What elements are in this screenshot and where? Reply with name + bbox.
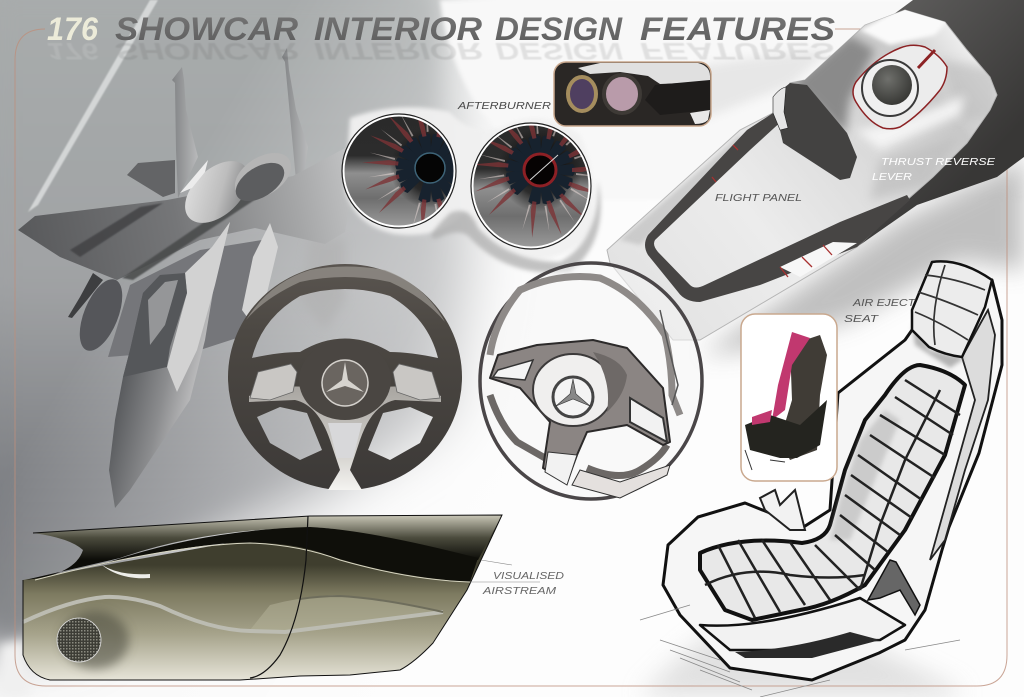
- label: air eject: AIR EJECT: [852, 298, 916, 309]
- right button pad: [393, 364, 440, 400]
- title: INTERIOR: [314, 11, 482, 47]
- title: DESIGN: [495, 11, 623, 47]
- photo: ejection seat inset: [741, 314, 837, 481]
- lower front bolster: [700, 598, 905, 650]
- jet shadow behind fuselage: [300, 235, 345, 330]
- engine right: [227, 143, 299, 209]
- cockpit canopy: [123, 273, 187, 377]
- label: lever: LEVER: [872, 171, 912, 183]
- console shading: [620, 5, 1000, 245]
- ejection seat legs: [745, 450, 785, 470]
- right tail fin: [282, 48, 308, 182]
- left tailplane: [127, 160, 175, 197]
- label: thrust reverse: THRUST REVERSE: [881, 156, 996, 168]
- title reflection: [47, 38, 835, 65]
- left gauge blades: [364, 116, 454, 224]
- nozzle right: [604, 75, 640, 113]
- upper spur: [25, 515, 502, 580]
- title reflection: FEATURES: [640, 38, 835, 65]
- right gauge blades: [476, 126, 588, 238]
- ejection seat harness: [772, 332, 810, 420]
- label: airstream: AIRSTREAM: [482, 586, 557, 597]
- seat shell fill: [663, 280, 1002, 680]
- wing: [18, 147, 352, 280]
- door body: [23, 515, 502, 680]
- cushion panel: [700, 365, 965, 620]
- panel: afterburner gauges: [342, 100, 608, 273]
- backrest side shading: [930, 310, 995, 560]
- sketch bottom segment: [572, 465, 670, 498]
- wing trailing stripe: [122, 193, 262, 280]
- panel: door with airstream: [23, 515, 540, 680]
- panel: flight console: [607, 0, 1024, 340]
- chrome airstream line: [23, 597, 443, 632]
- left button pad: [250, 364, 297, 400]
- title reflection: INTERIOR: [314, 38, 483, 65]
- panel: seat sketch: [640, 261, 1002, 697]
- right gauge: [470, 122, 592, 250]
- cushion shading: [830, 410, 900, 540]
- chrome upper line: [300, 596, 443, 612]
- steering wheel render: [228, 264, 462, 490]
- floor hatching: [640, 605, 960, 697]
- sketch dark hub side: [593, 352, 627, 412]
- title: 176: [47, 11, 98, 47]
- ejection seat pink strap: [752, 410, 772, 425]
- inset lower highlight: [690, 110, 710, 124]
- backrest quilting: [815, 380, 960, 590]
- ejection seat pan: [745, 400, 827, 458]
- speaker: [57, 611, 129, 669]
- rail chrome: [780, 242, 857, 277]
- console body: [607, 10, 997, 340]
- sketch right pad: [630, 398, 667, 442]
- label: flight panel: FLIGHT PANEL: [715, 193, 802, 204]
- jet fighter: [18, 48, 352, 508]
- title: SHOWCAR: [115, 11, 298, 47]
- light crease: [35, 543, 470, 582]
- engine left: [174, 149, 260, 235]
- missile: [68, 273, 103, 318]
- rotary knob: [862, 60, 918, 116]
- silver spokes: [249, 386, 441, 490]
- recess frame: [645, 113, 910, 302]
- sketch left pad: [493, 360, 533, 380]
- headrest: [912, 261, 992, 357]
- dark band: [100, 527, 478, 582]
- red accents: [712, 145, 832, 277]
- sketch spokes: [490, 340, 670, 482]
- label: seat: SEAT: [844, 314, 879, 325]
- chrome lens fill: [250, 595, 443, 632]
- left gauge: [341, 113, 457, 229]
- airbag hub: [299, 340, 391, 420]
- fuselage silver: [167, 222, 230, 392]
- title reflection: 176: [47, 38, 98, 65]
- gauge housing: [345, 107, 594, 260]
- steering wheel sketch: [480, 263, 702, 499]
- seat belt buckle: [760, 490, 805, 530]
- door shut line: [250, 516, 308, 678]
- lower centre opening: [328, 423, 362, 458]
- door outline: [23, 515, 502, 680]
- underbody panel: [108, 240, 265, 357]
- right intake: [242, 223, 278, 317]
- knob surround: [853, 45, 947, 129]
- sketch hub: [533, 354, 613, 426]
- right gauge dial: [524, 154, 556, 186]
- wheel rim and spokes: [228, 264, 462, 490]
- bolster dark shadow: [735, 632, 880, 658]
- red slider: [918, 50, 935, 68]
- headrest lines: [915, 265, 985, 345]
- ejection seat back: [780, 335, 827, 460]
- title: [47, 11, 836, 47]
- inset dark wing: [645, 80, 710, 115]
- sketch badge: [553, 377, 593, 417]
- rear fuselage dark tank: [71, 273, 131, 357]
- console dark surround: [805, 0, 1024, 247]
- left tail fin: [172, 67, 198, 198]
- housing shadow: [431, 180, 601, 273]
- sketch inner band: [490, 276, 680, 415]
- engine highlight: [180, 160, 208, 193]
- headrest shadow: [912, 325, 965, 368]
- left gauge dial: [415, 153, 445, 183]
- badge: [322, 360, 368, 406]
- photo: afterburner exhaust inset: [554, 62, 711, 126]
- label: visualised: VISUALISED: [493, 571, 564, 582]
- handle accent: [102, 565, 150, 578]
- sketch lower band: [490, 395, 667, 476]
- airstream pointer lines: [470, 560, 540, 582]
- seat side bracket: [868, 560, 920, 615]
- title reflection: DESIGN: [495, 38, 623, 65]
- seat cushion quilting: [705, 540, 865, 618]
- nozzle left: [568, 77, 596, 111]
- engine right dark core: [229, 155, 291, 209]
- rim top highlight: [246, 266, 445, 322]
- fuselage nose: [109, 222, 230, 508]
- sketch white spoke base: [545, 452, 577, 485]
- lever stem: [773, 87, 788, 130]
- title: FEATURES: [640, 11, 836, 47]
- title reflection: SHOWCAR: [115, 38, 299, 65]
- inset sky: [578, 63, 710, 84]
- thrust lever paddle: [773, 83, 857, 180]
- sketch paddle: [660, 310, 678, 405]
- sketch outer rim: [480, 263, 702, 499]
- label: afterburner: AFTERBURNER: [457, 101, 551, 112]
- wing stripe: [70, 203, 163, 257]
